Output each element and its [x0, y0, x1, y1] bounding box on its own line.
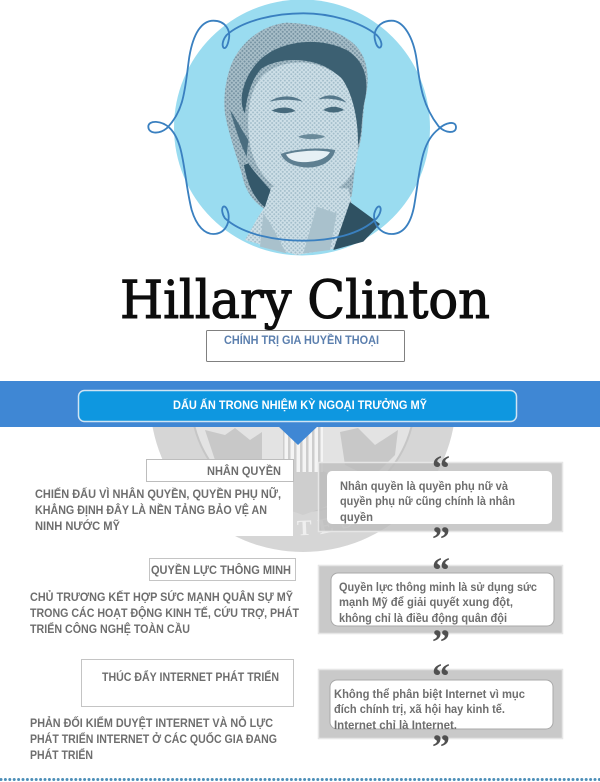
- section 3: internet: THÚC ĐẨY INTERNET PHÁT TRIỂN: [102, 669, 279, 684]
- pointer triangle: [278, 426, 318, 445]
- banner: DẤU ẤN TRONG NHIỆM KỲ NGOẠI TRƯỞNG MỸ: [173, 397, 427, 412]
- halftone portrait: [224, 23, 380, 255]
- blue band: [0, 381, 600, 427]
- section 3: internet: [30, 660, 294, 762]
- flourish: [148, 13, 456, 241]
- quote 1: ”: [432, 519, 450, 559]
- heading: [150, 558, 296, 580]
- neck and scarf: [245, 187, 352, 255]
- section 1: human rights: NHÂN QUYỀN: [207, 463, 281, 478]
- quote 3: đích chính trị, xã hội hay kinh tế.: [334, 702, 505, 716]
- heading: [146, 460, 294, 482]
- quote 2: mạnh Mỹ để giải quyết xung đột,: [339, 595, 513, 609]
- quote 2: [318, 550, 562, 662]
- quote 3: Không thể phân biệt Internet vì mục: [334, 687, 525, 701]
- face: [248, 62, 358, 197]
- quote 3: Internet chỉ là Internet.: [334, 718, 457, 732]
- subtitle box: [206, 330, 404, 362]
- portrait: blue circle with halftone face and flourish: [148, 0, 456, 256]
- quote 2: “: [432, 550, 450, 590]
- quote 3: “: [432, 656, 450, 696]
- section 3: internet: PHÁT TRIỂN INTERNET Ở CÁC QUỐC GIA ĐANG: [30, 731, 277, 746]
- section 2: smart power: TRIỂN CÔNG NGHỆ TOÀN CẦU: [30, 621, 190, 636]
- banner: [0, 381, 600, 445]
- section 1: human rights: NINH NƯỚC MỸ: [35, 518, 120, 533]
- dotted footer line: [1, 778, 600, 781]
- text mask: [35, 482, 293, 536]
- quote 1: quyền: [340, 510, 373, 524]
- quote 1: [318, 456, 564, 538]
- quote 1: Nhân quyền là quyền phụ nữ và: [340, 479, 508, 493]
- quote 1: quyền phụ nữ cũng chính là nhân: [340, 494, 515, 508]
- quote 2: Quyền lực thông minh là sử dụng sức: [339, 580, 537, 594]
- seal watermark: STATES OF: [297, 520, 330, 536]
- section 2: smart power: QUYỀN LỰC THÔNG MINH: [151, 562, 291, 577]
- blue circle: [174, 0, 430, 256]
- quote 3: ”: [432, 727, 450, 767]
- subtitle box: CHÍNH TRỊ GIA HUYỀN THOẠI: [224, 332, 379, 347]
- section 2: smart power: [30, 558, 300, 636]
- section 2: smart power: TRONG CÁC HOẠT ĐỘNG KINH TẾ, CỨU TRỢ, PHÁT: [30, 605, 300, 620]
- section 1: human rights: KHẲNG ĐỊNH ĐÂY LÀ NỀN TẢNG BẢO VỆ AN: [35, 502, 267, 517]
- seal watermark: [152, 427, 454, 552]
- heading: [82, 660, 294, 706]
- description: PHẢN ĐỐI KIỂM DUYỆT INTERNET VÀ NỖ LỰC: [30, 715, 273, 730]
- quote 3: [318, 664, 564, 746]
- quote 1: “: [432, 448, 450, 488]
- section 3: internet: PHÁT TRIỂN: [30, 747, 93, 762]
- section 1: human rights: [35, 460, 294, 536]
- description: CHỦ TRƯƠNG KẾT HỢP SỨC MẠNH QUÂN SỰ MỸ: [30, 589, 293, 604]
- title: Hillary Clinton: [120, 271, 490, 331]
- description: CHIẾN ĐẤU VÌ NHÂN QUYỀN, QUYỀN PHỤ NỮ,: [35, 486, 281, 501]
- quote 2: không chỉ là điều động quân đội: [339, 611, 507, 625]
- banner button: [78, 390, 516, 422]
- quote 2: ”: [432, 622, 450, 662]
